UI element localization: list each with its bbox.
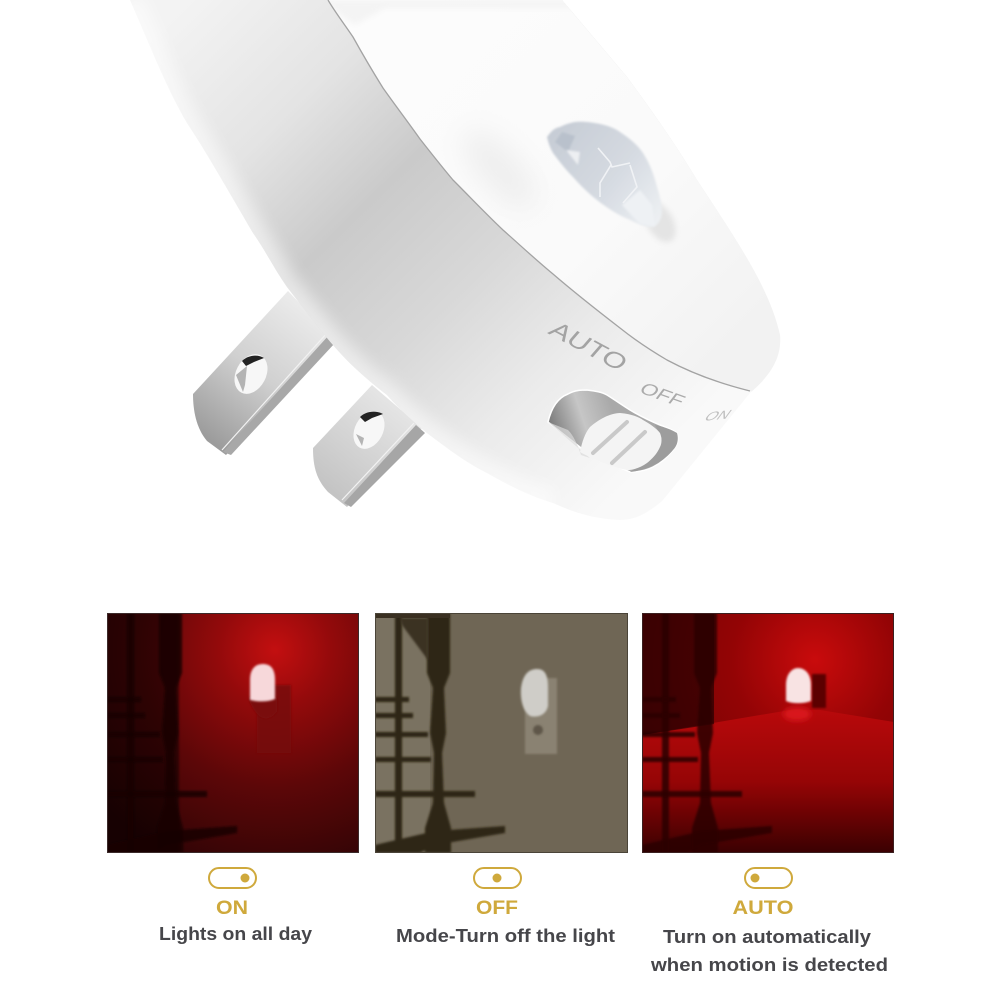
lit lamp bbox=[786, 668, 811, 703]
dark upper left bbox=[642, 613, 714, 735]
wall plate bbox=[257, 684, 292, 738]
staircase silhouette bbox=[375, 613, 505, 853]
body edge highlight bbox=[166, 81, 496, 478]
face plate bbox=[329, 0, 730, 332]
panel: OFF photo bbox=[375, 613, 628, 853]
caption: OFF bbox=[396, 868, 615, 946]
staircase silhouette bbox=[642, 613, 772, 853]
motion sensor lens bbox=[547, 122, 682, 248]
heading: OFF: OFF bbox=[476, 898, 518, 919]
description: OFF: Mode-Turn off the light bbox=[396, 926, 615, 946]
caption: ON bbox=[159, 868, 312, 944]
plug blade: right bbox=[313, 385, 425, 507]
staircase silhouette bbox=[107, 613, 237, 853]
product: plug-in night light bbox=[130, 0, 780, 510]
heading: AUTO: AUTO bbox=[732, 898, 794, 919]
lit lamp bbox=[250, 664, 275, 701]
label: AUTO: AUTO bbox=[543, 317, 633, 376]
heading: ON: ON bbox=[216, 898, 248, 919]
label: ON: ON bbox=[701, 408, 734, 424]
description: AUTO: Turn on automatically bbox=[663, 927, 871, 947]
label: OFF: OFF bbox=[636, 379, 689, 410]
light beam bbox=[642, 710, 894, 853]
face plate edge bbox=[328, 0, 750, 391]
description: AUTO bbox=[650, 927, 888, 975]
wall plate bbox=[525, 678, 557, 754]
panel: ON photo bbox=[107, 613, 359, 853]
toggle icon: AUTO bbox=[745, 868, 792, 888]
description: AUTO: when motion is detected bbox=[650, 955, 888, 975]
slide switch bbox=[548, 390, 678, 472]
panel: AUTO photo bbox=[642, 613, 894, 853]
switch labels bbox=[543, 317, 734, 424]
description: ON: Lights on all day bbox=[159, 924, 312, 944]
wall plate bbox=[812, 674, 826, 708]
unlit lamp bbox=[521, 669, 548, 717]
toggle icon: OFF bbox=[474, 868, 521, 888]
device body bbox=[130, 0, 780, 510]
caption: AUTO bbox=[650, 868, 888, 975]
plug blade: left bbox=[193, 291, 335, 455]
toggle icon: ON bbox=[209, 868, 256, 888]
